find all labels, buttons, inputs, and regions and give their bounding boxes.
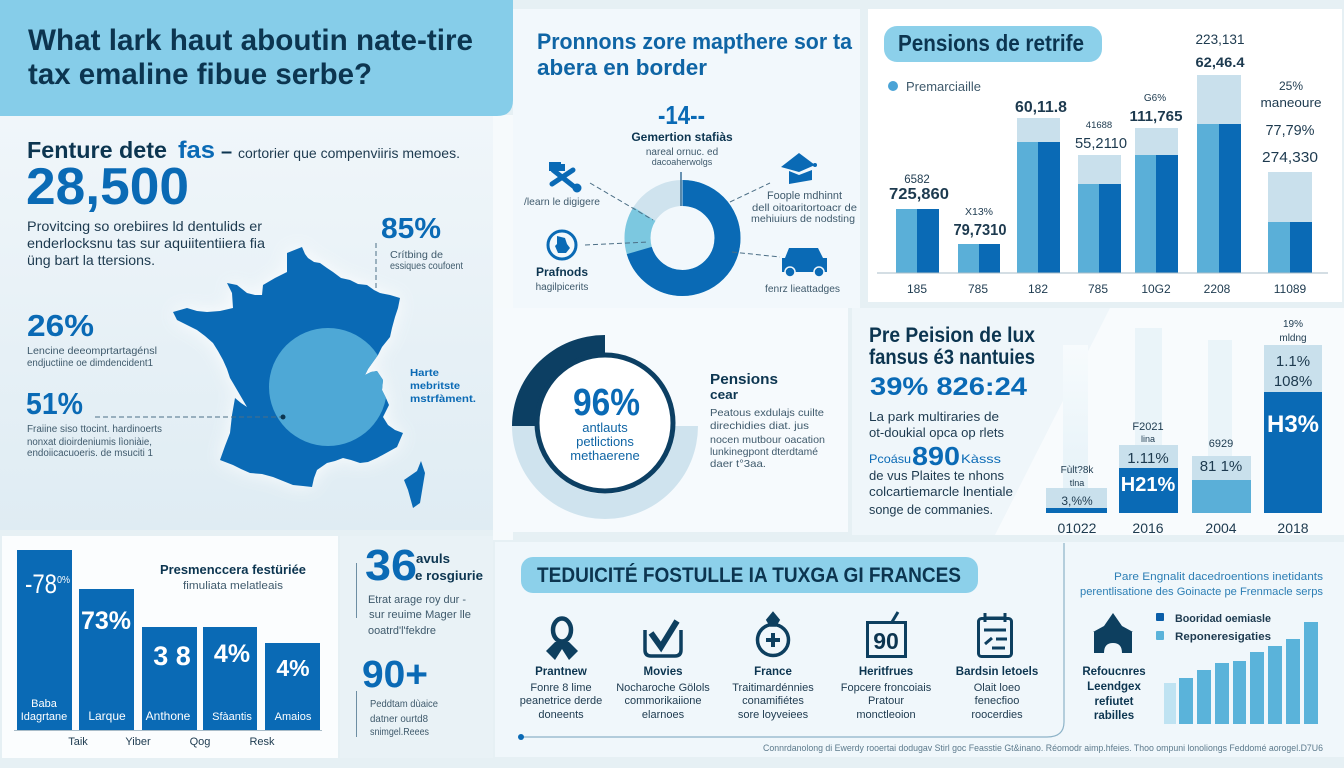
body text: La park multiraries de (869, 409, 999, 424)
axis labels: 785 (968, 282, 988, 296)
leader lines (585, 183, 780, 257)
feature: column 4 (841, 666, 932, 721)
feature: column 4: monctleoion (856, 709, 916, 721)
intro text: üng bart la ttersions. (27, 252, 155, 268)
body text: 890 (912, 441, 960, 471)
feature: column 1: doneents (538, 709, 584, 721)
panel: top middle donut (513, 9, 860, 308)
bar values: 73% (81, 607, 131, 635)
callout: 85% (376, 213, 463, 291)
stat: 90+: datner ourtd8 (370, 713, 428, 725)
bars (14, 550, 322, 730)
axis labels: 2208 (1204, 282, 1231, 296)
icon: calendar 90: 90 (873, 628, 899, 654)
donut chart (638, 172, 728, 283)
ring value: 96% (573, 382, 640, 424)
axis labels: 185 (907, 282, 927, 296)
feature: column 2: commorikaiione (624, 695, 702, 707)
column labels: 81 1% (1200, 458, 1242, 475)
column labels: 3,%% (1061, 494, 1093, 508)
legend: Premarciaille (906, 80, 981, 94)
bar names: Idagrtane (21, 711, 67, 723)
ring value: petlictions (576, 434, 634, 449)
feature: column 2: Movies (644, 666, 682, 678)
body text: Pcoásu (869, 452, 911, 466)
legend: Booridad oemiasle (1175, 613, 1271, 625)
title: tax emaline fibue serbe? (28, 58, 372, 91)
headline figure: 39% 826:24 (870, 373, 1027, 401)
feature: column 1 (520, 666, 602, 721)
icon: car (782, 248, 827, 277)
body text: colcartiemarcle lnentiale (869, 484, 1013, 499)
ring chart (512, 335, 698, 519)
house caption: Refoucnres (1082, 666, 1146, 678)
column labels: tlna (1070, 478, 1084, 488)
heading pill (884, 26, 1102, 62)
heading pill (521, 557, 978, 593)
ring text: Pensions (710, 372, 778, 388)
stat: 36: 36 (365, 541, 417, 590)
feature: column 4: Pratour (868, 695, 904, 707)
body text: ot-doukial opca op rlets (869, 425, 1004, 440)
callout: 26%: Lencine deeomprtartagénsl (27, 346, 157, 357)
stat: 36 (356, 541, 483, 637)
column labels (1061, 319, 1319, 508)
body text: songe de commanies. (869, 502, 993, 517)
stat: 90+ (356, 654, 438, 738)
column labels: Fùlt?8k (1061, 465, 1094, 476)
callout: 85%: Crítbing de (390, 250, 443, 261)
feature: column 3: sore loyveiees (738, 709, 809, 721)
map pointer (95, 414, 286, 420)
stat: 36: avuls (416, 552, 450, 566)
bar values: 0% (57, 575, 70, 586)
map note: mstrfàment. (410, 393, 476, 405)
bar names: Anthone (146, 709, 191, 723)
label: cap: Foople mdhinnt (767, 190, 842, 202)
chart title: fimuliata melatleais (183, 580, 284, 592)
callout: 26%: endjuctiine oe dimdencident1 (27, 358, 153, 369)
callout: 51%: endoiicacuoeris. de msuciti 1 (27, 448, 153, 459)
feature: column 5: fenecfioo (975, 695, 1019, 707)
column labels: mldng (1279, 333, 1307, 344)
stat: 36: Etrat arage roy dur - (368, 594, 466, 606)
bar values (25, 569, 310, 681)
icon: house (1093, 613, 1133, 653)
axis labels: Yiber (125, 736, 151, 748)
heading: Pronnons zore mapthere sor ta (537, 29, 853, 54)
label: badge: Prafnods (536, 265, 588, 279)
axis labels: 10G2 (1141, 282, 1171, 296)
legend (1156, 613, 1271, 643)
ring value: methaerene (570, 448, 640, 463)
value labels: G6% (1144, 93, 1166, 104)
label: badge (536, 265, 588, 293)
mini bar chart (1164, 622, 1318, 724)
icon: checkbox (645, 621, 681, 656)
side chart caption: Pare Engnalit dacedroentions inetidants (1114, 571, 1324, 583)
bar values: -78 (25, 569, 57, 599)
callout: 51% (26, 386, 162, 459)
subheading (27, 137, 460, 164)
column labels: 1.1% (1276, 353, 1310, 370)
year axis (1058, 520, 1309, 536)
bar values: 4% (276, 655, 310, 681)
feature: column 2: Nocharoche Gölols (616, 682, 710, 694)
column labels: H3% (1267, 411, 1319, 438)
feature: column 3: conamifiétes (742, 695, 804, 707)
column chart (1046, 328, 1322, 513)
body text (869, 409, 1013, 517)
bars (877, 75, 1328, 273)
callout: 26% (27, 308, 157, 369)
panel: ring gauge (495, 308, 848, 532)
icon: calendar 90 (868, 612, 906, 656)
feature: column 3: Traitimardénnies (732, 682, 814, 694)
bar names (21, 698, 312, 723)
chart title (160, 563, 306, 592)
icon: tools (549, 162, 580, 191)
map note: mebritste (410, 380, 460, 392)
feature: column 3 (732, 666, 814, 721)
value labels: 6582 (904, 174, 930, 186)
value labels: 111,765 (1130, 108, 1182, 125)
callout: 26%: 26% (27, 308, 94, 343)
feature: column 1: Prantnew (535, 666, 587, 678)
ring text: Peatous exdulajs cuilte (710, 407, 824, 419)
panel: left map section (0, 0, 513, 540)
ring text: cear (710, 387, 738, 402)
house caption: rabilles (1094, 710, 1134, 722)
callout: 51%: 51% (26, 386, 83, 421)
title (28, 24, 473, 91)
icon: graduation cap (781, 153, 817, 184)
heading: fansus é3 nantuies (869, 346, 1035, 369)
heading: abera en border (537, 55, 707, 80)
map note: Harte (410, 367, 439, 379)
ring text: lunkinegpont dterdtamé (710, 446, 818, 458)
column labels: 108% (1274, 373, 1312, 390)
subheading: cortorier que compenviiris memoes. (238, 145, 460, 161)
bar names: Amaios (275, 711, 312, 723)
stat: 36: ooatrd'l'fekdre (368, 625, 436, 637)
stat: 90+: snimgel.Reees (370, 726, 429, 738)
value labels: X13% (965, 206, 993, 218)
column labels: lina (1141, 434, 1155, 444)
value labels: 62,46.4 (1196, 54, 1245, 70)
bar names: Larque (88, 709, 126, 723)
bar names: Sfàantis (212, 711, 252, 723)
heading (869, 324, 1035, 369)
ring text: nocen mutbour oacation (710, 434, 825, 446)
title: What lark haut aboutin nate-tire (28, 24, 473, 57)
column labels: F2021 (1132, 421, 1164, 433)
value labels: 41688 (1086, 120, 1112, 131)
feature: column 5 (956, 666, 1038, 721)
icon: ribbon (546, 618, 578, 660)
label: car: fenrz lieattadges (765, 283, 840, 295)
label: cap: mehiuiurs de nodsting (751, 214, 855, 225)
legend: Reponeresigaties (1175, 631, 1271, 643)
panel: side stats (340, 536, 493, 758)
icon: medal (758, 614, 788, 656)
stat: 90+: 90+ (362, 654, 428, 696)
callout: 85%: essiques coufoent (390, 261, 463, 272)
value labels: 223,131 (1196, 31, 1245, 47)
value labels: 55,2110 (1075, 135, 1127, 152)
bar values: 4% (214, 640, 250, 668)
value labels: 60,11.8 (1015, 99, 1067, 116)
body text: de vus Plaites te nhons (869, 468, 1004, 483)
column labels: H21% (1121, 474, 1175, 496)
icon: clipboard (978, 613, 1012, 656)
heading pill: TEDUICITÉ FOSTULLE IA TUXGA GI FRANCES (537, 564, 961, 587)
axis labels (68, 736, 275, 748)
axis labels: Qog (190, 736, 210, 748)
chart title: Presmenccera festüriée (160, 563, 306, 577)
year axis: 2016 (1132, 520, 1164, 536)
callout: 51%: nonxat dioirdeniumis lìoniàie, (27, 437, 152, 448)
intro text (27, 218, 265, 268)
header banner (0, 0, 513, 116)
heading: Pre Peision de lux (869, 324, 1035, 347)
axis labels: Taik (68, 736, 88, 748)
ring text: daer t°3aa. (710, 458, 766, 470)
axis labels: Resk (249, 736, 275, 748)
callout: 85%: 85% (381, 213, 441, 245)
stat: 90+: Peddtam dùaice (370, 698, 438, 710)
axis labels: 11089 (1274, 282, 1307, 296)
panel: bottom left bar chart (2, 536, 338, 758)
heading (537, 29, 853, 80)
center stat (631, 100, 733, 167)
house caption: refiutet (1095, 696, 1134, 708)
column labels: 6929 (1209, 438, 1233, 450)
ring text: direchidies diat. jus (710, 420, 809, 432)
subheading: – (221, 141, 232, 163)
label: badge: hagilpicerits (536, 282, 588, 293)
feature: column 5: Olait loeo (974, 682, 1020, 694)
column labels: 1.11% (1127, 450, 1169, 467)
feature: column 1: peanetrice derde (520, 695, 602, 707)
feature: column 3: France (754, 666, 792, 678)
big number: 28,500 (26, 158, 189, 216)
axis labels (907, 282, 1307, 296)
label: tools: /learn le digigere (524, 196, 600, 208)
center stat: dacoaherwolgs (652, 157, 713, 167)
feature: column 5: Bardsin letoels (956, 666, 1038, 678)
value labels: 725,860 (889, 186, 949, 203)
column labels: 19% (1283, 319, 1303, 330)
bar values: 3 8 (153, 641, 191, 671)
map note (410, 367, 476, 405)
side chart caption: perentlisatione des Goinacte pe Frenmacle serps (1080, 586, 1324, 598)
subheading: Fenture dete (27, 137, 167, 163)
icon: badge (548, 231, 576, 259)
year axis: 01022 (1058, 520, 1097, 536)
feature: column 4: Heritfrues (859, 666, 913, 678)
feature: column 1: Fonre 8 lime (530, 682, 592, 694)
center stat: nareal ornuc. ed (646, 147, 718, 158)
value labels: 25% (1279, 79, 1303, 93)
value labels (889, 31, 1322, 239)
intro text: enderlocksnu tas sur aquiitentiiera fia (27, 235, 265, 251)
side chart caption (1080, 571, 1324, 598)
feature: column 2: elarnoes (642, 709, 685, 721)
panel: pensions bar chart (868, 9, 1342, 302)
house caption (1082, 666, 1146, 722)
center stat: -14-- (658, 100, 705, 130)
panel: bottom icons (495, 542, 1344, 757)
feature: column 5: roocerdies (971, 709, 1023, 721)
stat: 36: e rosgiurie (415, 569, 483, 583)
value labels: maneoure (1260, 96, 1322, 110)
callout: 51%: Fraiine siso ttocint. hardinoerts (27, 424, 162, 435)
stat: 36: sur reuime Mager lle (369, 609, 471, 621)
value labels: 79,7310 (954, 222, 1007, 239)
bar names: Baba (31, 698, 58, 710)
axis labels: 182 (1028, 282, 1048, 296)
ring text (710, 372, 825, 470)
ring value: antlauts (582, 420, 628, 435)
value labels: 77,79% (1266, 123, 1315, 139)
heading pill: Pensions de retrife (898, 30, 1084, 56)
value labels: 274,330 (1262, 149, 1318, 166)
feature: column 2 (616, 666, 710, 721)
year axis: 2018 (1277, 520, 1309, 536)
house caption: Leendgex (1087, 681, 1141, 693)
subheading: fas (178, 137, 215, 164)
axis labels: 785 (1088, 282, 1108, 296)
center stat: Gemertion stafiàs (631, 130, 733, 144)
ring value (570, 382, 640, 463)
feature: column 4: Fopcere froncoiais (841, 682, 932, 694)
intro text: Provitcing so orebiires ld dentulids er (27, 218, 262, 234)
label: cap: dell oitoaritortoacr de (752, 203, 857, 214)
year axis: 2004 (1205, 520, 1237, 536)
body text: Kàsss (961, 452, 1001, 466)
panel: pension trend (852, 308, 1344, 536)
map of France (173, 247, 425, 508)
label: cap (751, 190, 857, 225)
